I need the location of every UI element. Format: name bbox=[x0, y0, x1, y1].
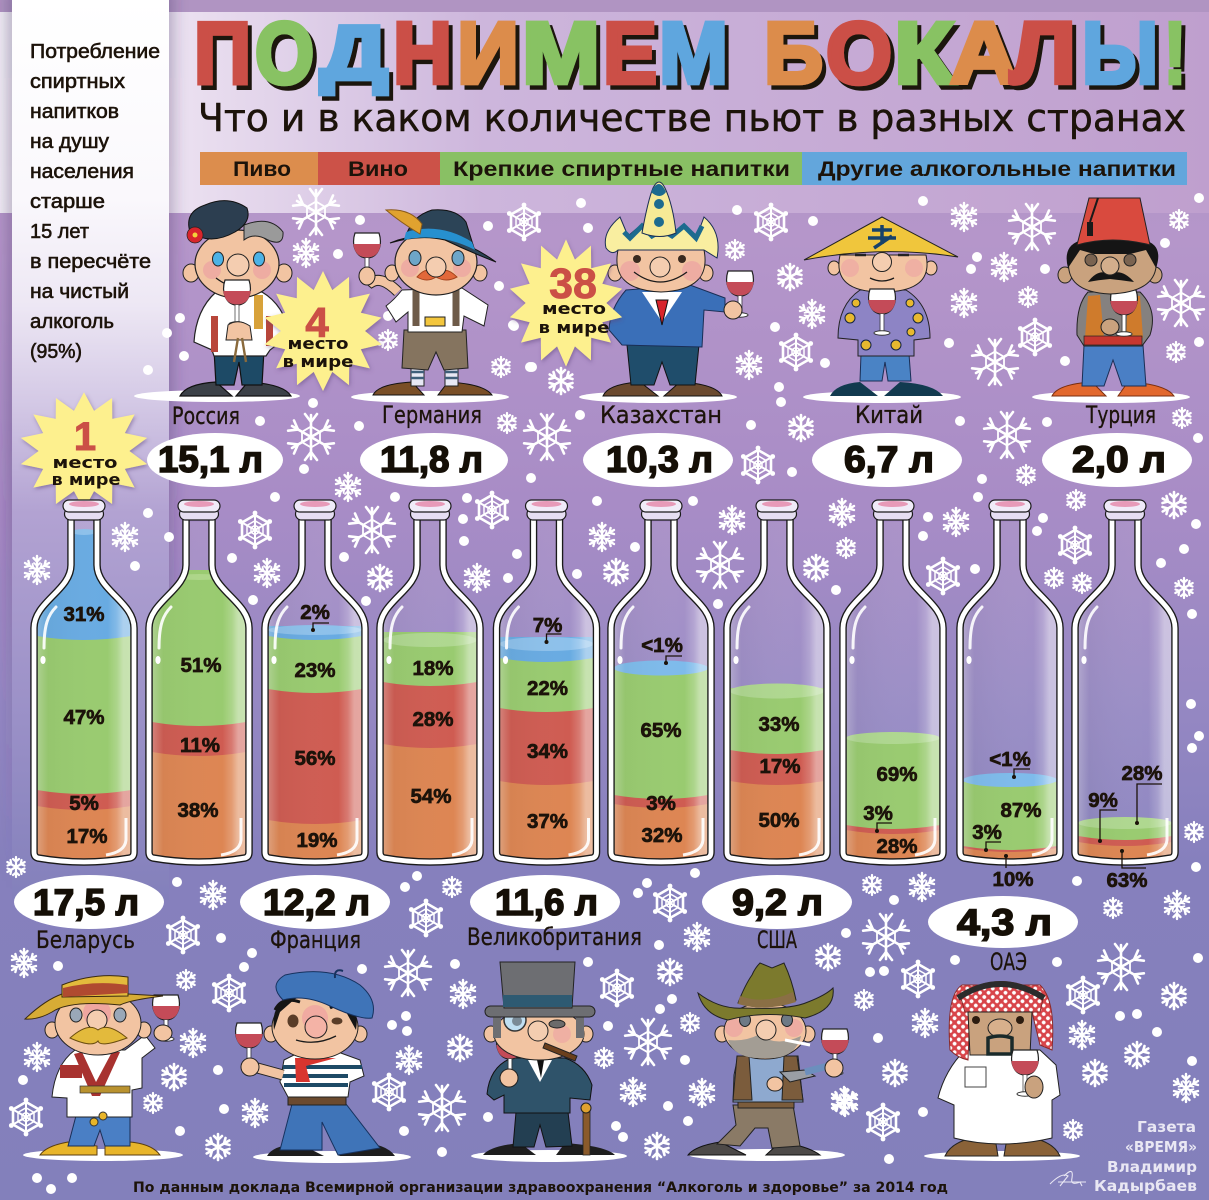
bottle: Belarus bbox=[34, 500, 134, 870]
Belarus: 17,5 л bbox=[33, 882, 139, 923]
France bbox=[240, 875, 390, 954]
bottle: France bbox=[265, 500, 365, 870]
badge: 38th place: в мире bbox=[538, 318, 610, 337]
badge: 38th place: 38 bbox=[549, 260, 597, 308]
title: ! bbox=[1164, 5, 1186, 102]
UAE: ОАЭ bbox=[990, 948, 1027, 976]
side note: what is measured: 15 лет bbox=[30, 221, 89, 243]
bottle: USA bbox=[727, 500, 827, 870]
badge: 38th place: место bbox=[542, 299, 606, 318]
badge: 38th place bbox=[510, 239, 622, 367]
legend: wine bbox=[318, 152, 440, 185]
China bbox=[812, 401, 962, 487]
USA: США bbox=[757, 926, 797, 954]
credit: Владимир bbox=[1107, 1158, 1197, 1176]
country labels and litres, top row bbox=[147, 401, 1192, 487]
badge: 1st place: место bbox=[52, 453, 118, 472]
character: UAE bbox=[924, 982, 1080, 1161]
title: А bbox=[950, 5, 1018, 102]
legend: beer: Пиво bbox=[233, 158, 291, 181]
legend: other: Другие алкогольные напитки bbox=[818, 158, 1176, 181]
Germany: Германия bbox=[382, 401, 482, 429]
bottle: China bbox=[843, 500, 943, 870]
badge: 4th place bbox=[264, 271, 382, 391]
bottle: Germany bbox=[380, 500, 480, 870]
bottle: Russia bbox=[149, 500, 249, 870]
bottle: Russia: 11% bbox=[180, 734, 220, 757]
character: Kazakhstan bbox=[579, 182, 754, 403]
Kazakhstan: Казахстан bbox=[600, 401, 722, 429]
Belarus: Беларусь bbox=[36, 926, 135, 954]
side note: what is measured: (95%) bbox=[30, 341, 82, 363]
side note: what is measured: на душу bbox=[30, 131, 109, 153]
badge: 4th place: место bbox=[288, 334, 348, 353]
badge: 4th place: в мире bbox=[282, 352, 354, 371]
USA bbox=[702, 875, 852, 954]
title: Н bbox=[393, 5, 452, 102]
Turkey bbox=[1042, 401, 1192, 487]
bottle: Kazakhstan: 3% bbox=[646, 792, 676, 815]
bottle: United Kingdom: 34% bbox=[527, 740, 568, 763]
bottle: UAE: 10% bbox=[992, 868, 1034, 891]
title: П bbox=[194, 5, 251, 102]
character: France bbox=[235, 970, 411, 1163]
legend: other bbox=[802, 152, 1187, 185]
bottle: Germany: 18% bbox=[412, 657, 454, 680]
bottle: Germany: 54% bbox=[410, 785, 452, 808]
title: Л bbox=[1010, 5, 1076, 102]
Kazakhstan: 10,3 л bbox=[606, 439, 713, 480]
bottle: Belarus: 31% bbox=[63, 603, 105, 626]
title: Ы bbox=[1082, 5, 1158, 102]
bottle: France: 2% bbox=[300, 601, 330, 624]
bottle: Belarus: 17% bbox=[66, 825, 108, 848]
header band bbox=[0, 12, 1209, 213]
Turkey: Турция bbox=[1085, 401, 1156, 429]
bottle: Belarus: 5% bbox=[69, 792, 99, 815]
bottle: United Kingdom: 37% bbox=[527, 810, 568, 833]
title: К bbox=[894, 5, 955, 102]
Kazakhstan bbox=[583, 401, 733, 487]
character: Belarus bbox=[23, 976, 183, 1161]
China: 6,7 л bbox=[844, 439, 934, 480]
side note: what is measured: Потребление bbox=[30, 41, 160, 63]
bottle: Kazakhstan bbox=[611, 500, 711, 870]
bottle: China: 3% bbox=[863, 802, 893, 825]
side note: what is measured: населения bbox=[30, 161, 134, 183]
bottle: Russia: 38% bbox=[177, 799, 219, 822]
USA: 9,2 л bbox=[732, 882, 823, 923]
title: О bbox=[255, 5, 314, 102]
side note: what is measured: алкоголь bbox=[30, 311, 114, 333]
credit: Кадырбаев bbox=[1094, 1177, 1197, 1195]
legend: spirits: Крепкие спиртные напитки bbox=[453, 158, 790, 181]
bottle: Russia: 51% bbox=[180, 654, 222, 677]
title: М bbox=[659, 5, 728, 102]
bottle: UAE bbox=[960, 500, 1060, 891]
character: Russia bbox=[134, 201, 300, 402]
character: Germany bbox=[351, 210, 509, 403]
title: О bbox=[826, 5, 892, 102]
character: Great Britain bbox=[471, 962, 627, 1162]
France: 12,2 л bbox=[263, 882, 370, 923]
country labels and litres, bottom row bbox=[14, 875, 1078, 976]
badge: 1st place: 1 bbox=[74, 415, 96, 459]
bottle: China: 28% bbox=[876, 835, 918, 858]
title: Д bbox=[320, 11, 388, 96]
bottle: Kazakhstan: <1% bbox=[641, 634, 683, 657]
credit: Газета bbox=[1137, 1118, 1196, 1136]
bottle: Turkey bbox=[1075, 500, 1175, 892]
info column shadow bbox=[6, 0, 174, 890]
credit bbox=[1094, 1118, 1197, 1195]
badge: 4th place: 4 bbox=[305, 299, 329, 346]
bottle: USA: 33% bbox=[758, 713, 800, 736]
character: USA bbox=[688, 963, 849, 1161]
bottle: Kazakhstan: 32% bbox=[641, 824, 683, 847]
bottle: USA: 17% bbox=[759, 755, 801, 778]
side note: what is measured: напитков bbox=[30, 101, 119, 123]
subtitle: Что и в каком количестве пьют в разных странах bbox=[198, 96, 1186, 140]
bottle: Turkey: 28% bbox=[1121, 762, 1163, 785]
bottle: France: 19% bbox=[296, 829, 338, 852]
bottle: France: 23% bbox=[294, 659, 336, 682]
United Kingdom: 11,6 л bbox=[495, 882, 598, 923]
legend: wine: Вино bbox=[348, 158, 408, 181]
badge: 1st place bbox=[21, 392, 147, 510]
bottle: UAE: <1% bbox=[989, 748, 1031, 771]
Germany: 11,8 л bbox=[380, 439, 483, 480]
badge: 1st place: в мире bbox=[52, 470, 121, 489]
credit: «ВРЕМЯ» bbox=[1125, 1138, 1197, 1156]
bottle: Turkey: 63% bbox=[1106, 869, 1148, 892]
title: Б bbox=[764, 5, 823, 102]
UAE: 4,3 л bbox=[957, 902, 1052, 943]
Germany bbox=[360, 401, 508, 487]
legend bbox=[200, 152, 1187, 185]
info column bbox=[12, 0, 169, 900]
legend: spirits bbox=[440, 152, 802, 185]
legend: beer bbox=[200, 152, 318, 185]
bottle: United Kingdom bbox=[496, 500, 596, 870]
bottle: Germany: 28% bbox=[412, 708, 454, 731]
bottle: United Kingdom: 7% bbox=[533, 614, 562, 637]
character: China bbox=[803, 217, 961, 403]
bottle: USA: 50% bbox=[758, 809, 800, 832]
bottle: UAE: 3% bbox=[972, 821, 1002, 844]
Belarus bbox=[14, 875, 164, 954]
bottle: Turkey: 9% bbox=[1088, 789, 1118, 812]
side note: what is measured: на чистый bbox=[30, 281, 129, 303]
bottle: United Kingdom: 22% bbox=[527, 677, 568, 700]
France: Франция bbox=[270, 926, 361, 954]
bottle: UAE: 87% bbox=[1000, 799, 1042, 822]
bottle: Belarus: 47% bbox=[63, 706, 105, 729]
source note: По данным доклада Всемирной организации здравоохранения “Алкоголь и здоровье” за 2014 год bbox=[133, 1180, 948, 1196]
Russia bbox=[147, 402, 283, 487]
title: И bbox=[457, 5, 519, 102]
side note: what is measured: в пересчёте bbox=[30, 251, 151, 273]
UAE bbox=[928, 896, 1078, 976]
bottle: China: 69% bbox=[876, 763, 918, 786]
Russia: 15,1 л bbox=[158, 439, 263, 480]
side note: what is measured: спиртных bbox=[30, 71, 125, 93]
China: Китай bbox=[855, 401, 923, 429]
Russia: Россия bbox=[172, 402, 240, 430]
United Kingdom bbox=[467, 875, 642, 951]
character: Turkey bbox=[1032, 198, 1190, 403]
United Kingdom: Великобритания bbox=[467, 923, 642, 951]
signature bbox=[1050, 1171, 1086, 1186]
title: М bbox=[522, 5, 600, 102]
Turkey: 2,0 л bbox=[1072, 439, 1166, 480]
side note: what is measured: старше bbox=[30, 191, 105, 213]
bottle: Kazakhstan: 65% bbox=[640, 719, 682, 742]
title: Е bbox=[603, 5, 657, 102]
bottle: France: 56% bbox=[294, 747, 336, 770]
